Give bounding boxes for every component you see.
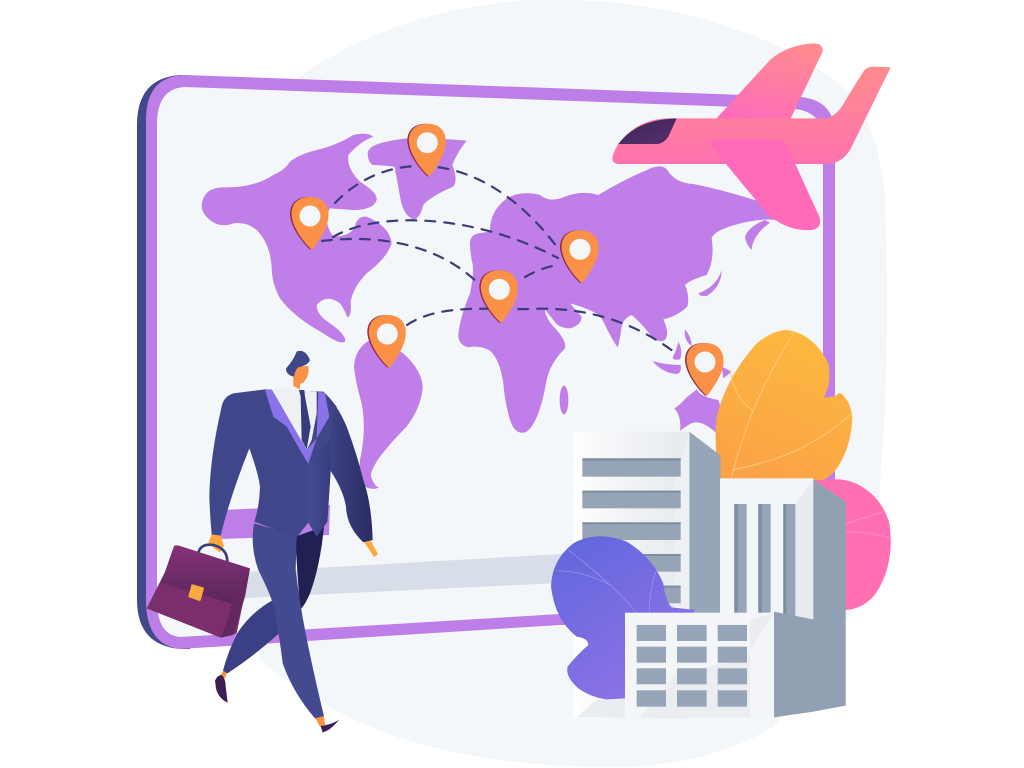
back trouser shadow	[295, 527, 324, 610]
hair	[286, 351, 310, 377]
location pins	[290, 124, 724, 396]
pin: south america	[367, 315, 406, 368]
screen frame	[137, 75, 835, 649]
building: tall left	[573, 432, 721, 718]
shirt	[272, 387, 317, 450]
building: middle	[720, 478, 846, 712]
dashed flight routes	[322, 166, 678, 355]
pin: north america	[290, 197, 328, 250]
fuselage and tail	[612, 67, 891, 164]
right sleeve	[323, 392, 373, 542]
businessman	[147, 351, 378, 733]
australia	[674, 389, 730, 435]
jacket	[209, 389, 337, 537]
background blob	[200, 0, 887, 767]
upper wing	[715, 43, 823, 120]
neck and face	[293, 366, 309, 389]
pin: africa	[479, 270, 518, 323]
jacket front panel	[308, 440, 331, 537]
front shoe	[315, 715, 339, 733]
orange leaf	[716, 330, 852, 480]
front leg	[253, 523, 324, 718]
north america, greenland and south america	[202, 134, 467, 489]
purple leaf	[551, 536, 695, 700]
lower wing	[711, 139, 820, 230]
right hand	[364, 541, 378, 557]
back leg	[223, 599, 279, 673]
small purple panel behind man	[220, 505, 330, 539]
lapels	[265, 389, 329, 464]
pin: central asia	[560, 230, 598, 283]
eurasia, africa and islands	[458, 166, 775, 433]
left hand	[208, 534, 224, 552]
pink leaf	[813, 479, 891, 610]
pin: arctic	[407, 124, 446, 177]
briefcase	[147, 545, 250, 638]
world map	[202, 134, 775, 489]
cockpit window	[618, 118, 677, 144]
pin: oceania	[685, 343, 724, 396]
back shoe	[215, 671, 228, 703]
city with plants	[551, 330, 891, 718]
building: front low	[577, 612, 822, 717]
tie	[299, 390, 311, 449]
airplane	[612, 43, 891, 230]
ground strip	[245, 553, 580, 598]
